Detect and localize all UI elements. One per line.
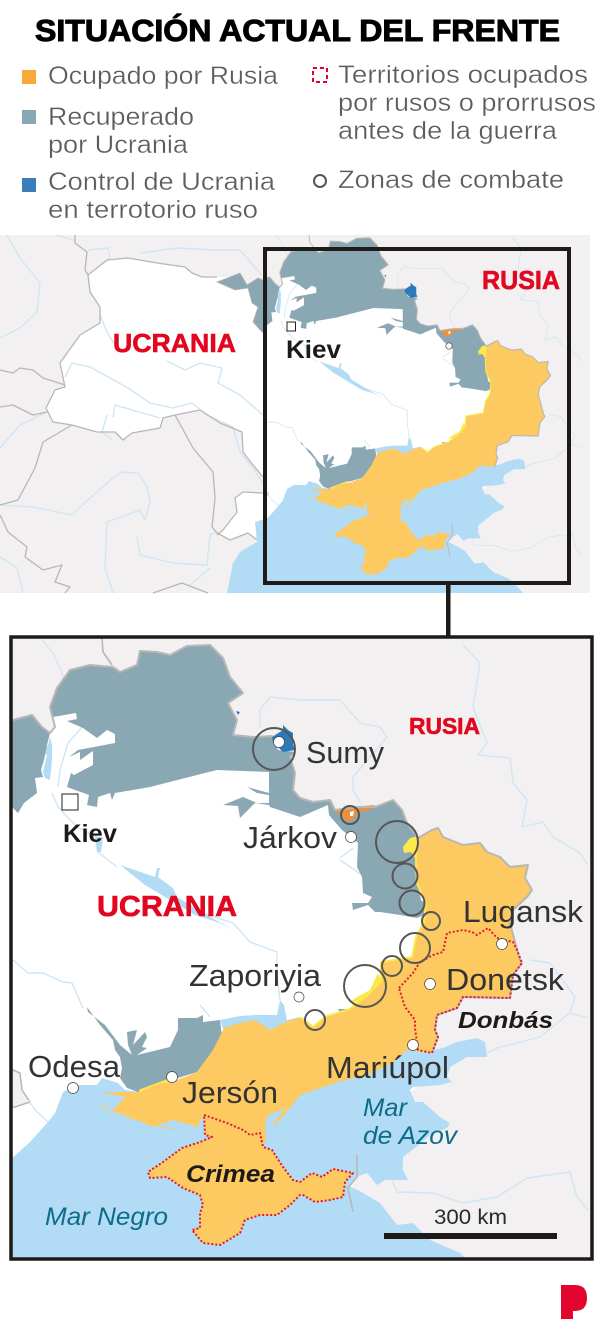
legend item: territories occupied before the war: Territorios ocupados xyxy=(338,61,588,89)
legend item: Ukrainian control in Russian territory: en terrotorio ruso xyxy=(48,196,258,224)
legend item: territories occupied before the war: antes de la guerra xyxy=(338,117,557,145)
label: Kiev: Kiev xyxy=(63,820,117,848)
overview map xyxy=(0,229,594,600)
Black Sea west coast xyxy=(227,485,300,593)
label: Crimea: Crimea xyxy=(186,1161,275,1188)
connector between maps xyxy=(446,585,450,637)
legend item: territories occupied before the war: por rusos o prorrusos xyxy=(338,89,596,117)
boundary: Crimea pre-war occupied xyxy=(148,1115,353,1245)
legend item: recovered by Ukraine: Recuperado xyxy=(48,103,194,131)
borders of neighbouring countries xyxy=(0,235,263,593)
label: Lugansk: Lugansk xyxy=(463,894,583,929)
marker: Kharkiv dot xyxy=(446,343,452,349)
label: Sumy: Sumy xyxy=(306,735,384,770)
label: Zaporiyia: Zaporiyia xyxy=(189,958,322,993)
legend item: combat zones: Zonas de combate xyxy=(338,166,564,194)
map base: territories xyxy=(0,630,600,1290)
legend item: territories occupied before the war xyxy=(313,61,596,145)
label: Mar de Azov: Mar xyxy=(363,1094,409,1122)
recovered area west of the inset xyxy=(217,273,278,332)
label: Rusia: RUSIA xyxy=(409,713,480,739)
label: Ucrania: UCRANIA xyxy=(113,328,236,358)
legend item: recovered by Ukraine: por Ucrania xyxy=(48,131,188,159)
legend item: Ukrainian control in Russian territory xyxy=(22,168,275,224)
detail map frame xyxy=(11,637,592,1259)
label: Kiev: Kiev xyxy=(286,336,341,364)
title: SITUACIÓN ACTUAL DEL FRENTE xyxy=(35,12,560,48)
label: Mar Negro: Mar Negro xyxy=(45,1203,168,1231)
city dots xyxy=(68,736,508,1094)
label: Odesa: Odesa xyxy=(28,1049,121,1084)
label: Donbás: Donbás xyxy=(458,1007,553,1033)
label: Donetsk: Donetsk xyxy=(446,962,565,997)
label: Járkov: Járkov xyxy=(243,820,338,855)
Ukraine west land xyxy=(46,258,270,540)
label: Mar de Azov xyxy=(363,1094,459,1150)
inset frame on overview map xyxy=(265,249,569,583)
scale bar xyxy=(384,1206,557,1239)
legend item: Ukrainian control in Russian territory: Control de Ucrania xyxy=(48,168,275,196)
label: Rusia: RUSIA xyxy=(482,265,560,295)
marker: Kiev xyxy=(62,794,78,810)
label: Jersón: Jersón xyxy=(182,1075,278,1110)
label: Mariúpol: Mariúpol xyxy=(326,1050,449,1085)
rivers of the west xyxy=(0,235,300,593)
label: Ucrania: UCRANIA xyxy=(97,891,237,923)
legend xyxy=(22,61,596,224)
scale bar: 300 km xyxy=(434,1206,507,1229)
marker: Kiev xyxy=(287,322,296,331)
logo xyxy=(561,1285,587,1319)
label: Mar de Azov: de Azov xyxy=(363,1122,459,1150)
detail map xyxy=(0,630,600,1290)
eastern part of the map, same geography as the detail map xyxy=(267,235,582,593)
boundary: Donbás pre-war occupied xyxy=(399,928,522,1053)
legend item: recovered by Ukraine xyxy=(22,103,194,159)
legend item: occupied by Russia: Ocupado por Rusia xyxy=(48,62,278,90)
combat zones xyxy=(253,728,440,1030)
